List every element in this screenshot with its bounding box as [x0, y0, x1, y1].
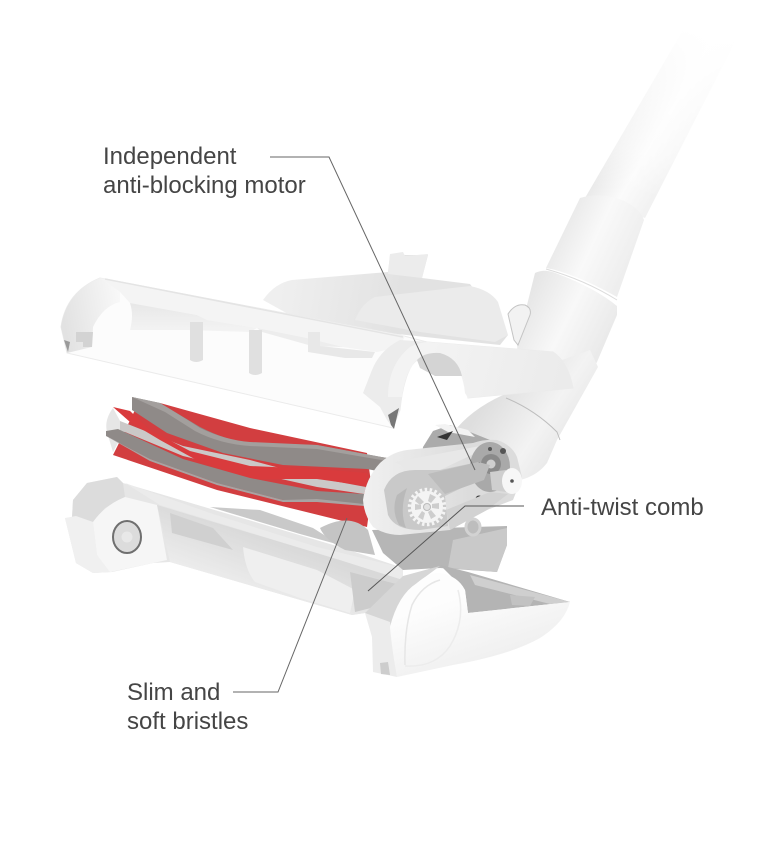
- drive hub with gear and motor: [363, 440, 522, 535]
- front end shell with foot: [365, 573, 570, 677]
- label: slim and soft bristles: soft bristles: [127, 708, 248, 735]
- vacuum handle tube: [575, 10, 755, 218]
- label: anti-twist comb: Anti-twist comb: [541, 494, 704, 521]
- motor housing and pedestal: [365, 424, 570, 627]
- elbow neck: [453, 350, 598, 480]
- label: independent anti-blocking motor: Independent: [103, 143, 237, 170]
- back housing of brush head: [263, 252, 530, 345]
- leader line: motor: [270, 157, 475, 470]
- collar joints: [517, 195, 644, 395]
- leader line: bristles: [233, 518, 347, 692]
- bottom base tray: [65, 477, 403, 615]
- label: slim and soft bristles: Slim and: [127, 679, 220, 706]
- leader line: comb: [368, 506, 524, 591]
- roller brush: red and grey bristles: [106, 397, 387, 527]
- top lid shell: [61, 278, 573, 429]
- label: independent anti-blocking motor: anti-blocking motor: [103, 172, 306, 199]
